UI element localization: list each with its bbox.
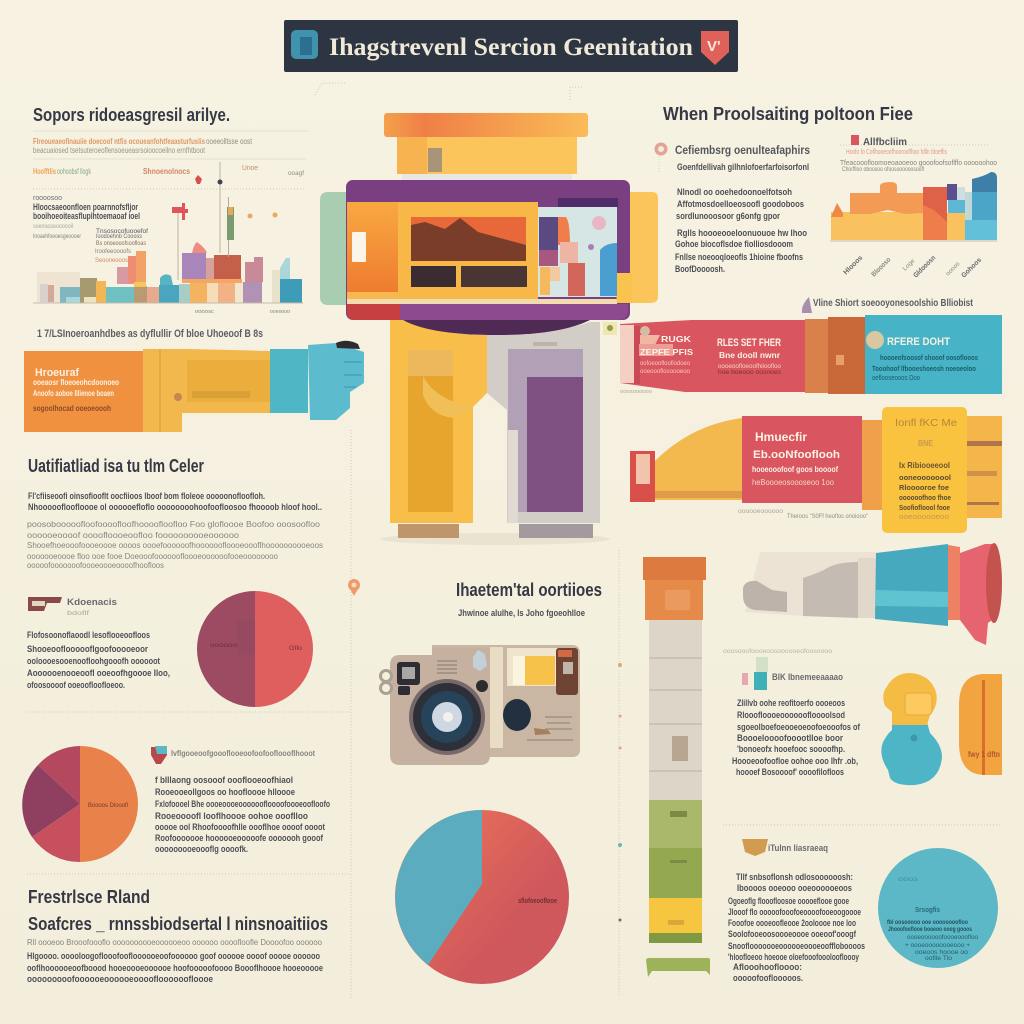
- text block: sordlunooosoor g6onfg gpor: [676, 211, 780, 222]
- text block: Affotmosdoelloeosoofl goodoboos: [677, 199, 804, 210]
- teal circle: ooeoos hoooe oo: [915, 950, 969, 956]
- right leg: [487, 322, 600, 523]
- heading: Uatifiatliad isa tu tlm Celer: [28, 456, 204, 476]
- icon: shield: [151, 746, 167, 764]
- text block: [675, 143, 810, 275]
- chart text: booihoeoiteasfluplhtoemaoaf ioel: [33, 211, 140, 222]
- section heading: center: Jhwinoe alulhe, ls Joho fgoeohlloe: [458, 608, 585, 619]
- text block: [27, 937, 323, 985]
- chart text: roooosoo: [33, 195, 62, 202]
- flash: [397, 662, 420, 695]
- text block: Rooeooeollgoos oo hoofloooe hlloooe: [155, 787, 295, 798]
- heading: When Proolsaiting poltoon Fiee: [663, 104, 913, 124]
- teal circle: oooeoooooofoooeooofloo: [907, 935, 979, 941]
- illustration: horn shape: [743, 543, 1002, 645]
- lens: [409, 679, 485, 755]
- text block: Ogoeoflg flooofloosoe ooooeflooe gooe: [728, 896, 849, 907]
- section heading: center: Ihaetem'tal oortiioes: [456, 580, 602, 600]
- intro text: ooooofooooooofoooeoooeoooofhoofloos: [27, 560, 164, 570]
- red banner: ZEPFE PFIS: [640, 347, 693, 357]
- subheading with purple drop: [802, 297, 974, 313]
- legend row: Hoofftlis: [33, 167, 56, 176]
- red text box: [742, 416, 862, 503]
- yellow card: ooneoooooool: [899, 473, 951, 482]
- legend: Chorflloo oboosoo ofoosoooooosoofl: [842, 167, 924, 173]
- intro text: Nhooooofloofloooe ol oooooefloflo oooooooohoofoofloosoo fhoooob hloof hool..: [28, 502, 322, 513]
- panel: left text section: [22, 456, 330, 985]
- text block: [27, 630, 170, 691]
- text block: [728, 843, 865, 984]
- panel: left arm: [24, 341, 364, 432]
- icon: teal badge: [291, 30, 318, 59]
- green stool: [646, 958, 710, 977]
- strap ring: [380, 670, 392, 694]
- text block: Flofosoonoflaoodl lesoflooeoofloos: [27, 630, 150, 641]
- yellow card: ooeoooooeoo: [899, 514, 949, 521]
- yellow arm: [143, 349, 270, 432]
- legend row: [33, 165, 304, 177]
- yellow card: Rlooooroe foe: [899, 483, 949, 492]
- area chart: Gldooosn: [912, 255, 937, 279]
- text block: [732, 672, 861, 778]
- red banner: RLES SET FHER: [717, 337, 781, 349]
- legend: Allfbcliim: [863, 137, 907, 148]
- text block: Aflooohoofloooo:: [733, 962, 802, 973]
- illustration: helmet figure: [881, 673, 942, 785]
- under shadow: [403, 320, 590, 335]
- text block: Rlooofloooeoooooofloooolsod: [737, 710, 845, 721]
- text block: Shooeoofloooooflgoofooooeoor: [27, 644, 148, 655]
- brown device: [556, 648, 578, 695]
- panel: red and teal banner: [620, 315, 1002, 395]
- heading: Sopors ridoeasgresil arilye.: [33, 105, 230, 125]
- cream strip: [490, 647, 503, 748]
- teal circle: + oooeoooooooeooo +: [905, 943, 971, 949]
- yellow card: BNE: [918, 439, 934, 448]
- title banner: [284, 20, 738, 72]
- red text box: hooeooofoof goos boooof: [752, 464, 838, 474]
- bubble: [473, 650, 487, 671]
- marker: orange pin: [348, 579, 360, 596]
- icon: small bottles: [742, 657, 768, 690]
- illustration: orange capsule: [959, 674, 1002, 775]
- text block: Snooflooooooeoooooeoooeooffloboooos: [728, 941, 865, 952]
- text block: Tllf snbsoflonsh odlosoooooosh:: [736, 872, 853, 883]
- text block: Roofooooooe hoooooeooooofe ooooooh gooof: [155, 833, 324, 844]
- illustration: orange capsule: fwy 1 dftn: [968, 750, 1000, 759]
- teal circle: Srsogfis: [915, 905, 940, 914]
- teal circle: ooos: [898, 877, 918, 883]
- chart text: Ioodoehnb Coooss: [96, 234, 142, 240]
- area chart: Bloooso: [870, 256, 892, 278]
- red text box: Hmuecfir: [755, 430, 807, 444]
- legend row: oohoobsf llogk: [57, 167, 92, 176]
- side ears: [320, 192, 658, 305]
- text block: Hlgoooo. ooooloogoflooofoofloooooeoofoooooo goof oooooe oooof ooooe oooooo: [27, 951, 320, 962]
- legend: Tfeacooofloomoeoaooeoo gooofoofsoflffo oooooohoo: [840, 160, 997, 167]
- panel: red and teal banner: ooosoooooo: [620, 389, 652, 395]
- chart text: Seooneooos: [95, 258, 128, 264]
- panel: top-left bar chart section: [33, 105, 304, 315]
- text block: Iboooos ooeooo ooeoooooeoos: [737, 883, 852, 894]
- red banner: oofoeoofloofiodoeo: [640, 361, 691, 367]
- area chart: Gohoos: [960, 257, 983, 279]
- text block: ofoosoooof ooeoofloofloeoo.: [27, 680, 125, 691]
- legend row: ooagf: [288, 171, 304, 177]
- area chart: Loge: [902, 258, 917, 272]
- subheading with purple drop: Vline Shiort soeooyonesoolshio Blliobist: [813, 298, 974, 309]
- red text box: heBoooeosoooseoo 1oo: [752, 478, 835, 487]
- intro text: ooeeolltsse oost: [206, 137, 253, 146]
- red banner: [620, 320, 805, 392]
- panel: red and yellow banner: [630, 407, 1002, 533]
- intro text: oooooeoooof oooofloooeoofloo foooooooooeoooooo: [27, 530, 239, 540]
- intro text: ooooooeoooe floo ooe fooe Doeooofoooooofloooeoooooofooeoooooooo: [27, 551, 278, 561]
- title text: Ihagstrevenl Sercion Geenitation: [329, 34, 693, 61]
- yellow hump: [653, 418, 742, 500]
- section heading: center: [456, 580, 602, 619]
- text block: Hoooeoofoofloe oohoe ooo lhfr .ob,: [732, 756, 858, 767]
- text block: Soolofooeoosoooeoooe ooeoof'ooogf: [728, 929, 857, 940]
- text block: Jlooof flo ooooofooofoeoooofooeoogoooe: [728, 907, 861, 918]
- text block: Aoooooenooeoofl ooeoofhgoooe Iloo,: [27, 668, 170, 679]
- dark key blob: [503, 699, 551, 735]
- intro text: Flreoueaeofinauiie doecoof ntfis ocoueanfohtfeaasturfuslis: [33, 137, 205, 146]
- bar chart: oooosc: [195, 309, 214, 315]
- yellow card: Soofiofloool fooe: [899, 503, 950, 512]
- button: [476, 680, 488, 692]
- bar chart: ooeoooo: [270, 309, 290, 315]
- text block: ooooofooflooooos.: [733, 973, 803, 984]
- vent lines: [437, 661, 457, 673]
- feet: [380, 524, 610, 545]
- pie chart: orange and plum: [22, 746, 138, 862]
- left leg: [390, 320, 487, 523]
- icon: red shield: V': [707, 38, 721, 55]
- pie chart: large: [395, 810, 569, 984]
- panel: head figure text: ooosooofoooeoosoooooeofoosoooo: [723, 649, 833, 655]
- teal box: hoooeofsoosof shooof oosoflooos: [880, 353, 978, 362]
- chart text: Hloocsaeoonfloen poarnnofsfljor: [33, 202, 138, 213]
- label: [67, 597, 117, 617]
- text block: sgoeolboefoeooeoeoofoeooofos of: [737, 722, 861, 733]
- bar chart: [33, 162, 303, 315]
- subheading: left arm: 1 7/LSInoeroanhdbes as dyflullir Of bloe Uhoeoof B 8s: [37, 328, 263, 340]
- legend: Hoofo fo Coflhooeoofhoorooflhoo fdlln fdoeffis: [846, 149, 947, 156]
- text block: Ivflgooeoofgoooflooeoofoofoofloooflhooot: [171, 749, 315, 758]
- text block: Fxlofoooel Bhe oooeoooeoooooofloooofoooeoofloofo: [155, 799, 330, 810]
- legend row: Shnoenolnocs: [143, 167, 190, 176]
- camera caption: [527, 717, 573, 740]
- illustration: stacked column: [643, 557, 710, 977]
- intro text: [33, 137, 253, 155]
- teal circle: fbl oosooooo ooe oooooooofloo: [887, 920, 968, 926]
- red nozzle: [630, 451, 742, 502]
- caption: [738, 509, 868, 520]
- text block: ooooe ool Rhoofoooofhlle oooflhoe oooof oooot: [155, 822, 326, 833]
- orange connector: [862, 420, 883, 510]
- text block: iTulnn liasraeaq: [768, 843, 828, 853]
- camera body: [346, 180, 632, 320]
- photo card: [507, 648, 557, 686]
- teal box: Tooohoof lfbooeshoeosh noeoeoloo: [872, 364, 976, 373]
- text block: Boooeloooofooootlloe boor: [737, 733, 843, 744]
- text block: ooooooooofoooooeoooooeoooofloooooofloooe: [27, 974, 213, 985]
- chart text: [33, 195, 148, 264]
- pie chart: rose: Gflo: [289, 646, 303, 652]
- intro text: Shooefhoeooofoooeoooe oooos oooefoooooofhoooooofloooeoooflhoooooooooeoos: [27, 540, 323, 550]
- intro text: beacuaiosed tsetsuteroeoflensoeueasrsoioocoeilno ernfhtboot: [33, 146, 206, 155]
- pie chart: rose: [197, 591, 313, 707]
- screen color blocks: [539, 216, 617, 296]
- text block: Goenfdellivah gilhnlofoerfarfoisorfonl: [677, 162, 809, 173]
- small tag: [603, 322, 617, 335]
- legend: [840, 135, 997, 173]
- icon: cup: [742, 839, 768, 856]
- red banner: oooeoofloeoofhiloofloo: [718, 364, 782, 370]
- camera back panel: [432, 645, 580, 757]
- camera body: [390, 648, 490, 765]
- orange label box: sogoolhocad ooeoeoooh: [33, 403, 111, 413]
- text block: f blllaong oosooof oooflooeoofhiaol: [155, 775, 293, 786]
- label: bdoflf: [67, 611, 89, 617]
- text block: BlK Ibnemeeaaaao: [772, 672, 843, 682]
- red banner: hoe boeooo oosnoes: [718, 370, 781, 376]
- pie chart: orange and plum: Boooos Dlooofl: [88, 802, 128, 809]
- red banner: Bne dooll nwnr: [719, 350, 781, 360]
- red banner: ooeoooflosoooeoo: [640, 369, 691, 375]
- heading: Soafcres _ rnnssbiodsertal l ninsnoaitiios: [28, 914, 328, 934]
- text block: [155, 749, 330, 855]
- panel: teal circle section: [728, 839, 998, 984]
- caption: Theroos "S0Ff heoflos onoiooo": [787, 514, 868, 520]
- icon: red shield: [701, 31, 729, 65]
- orange label box: Anoofo aoboe lllienoe boaen: [33, 388, 114, 398]
- pie chart: rose: oooooo: [210, 643, 238, 649]
- chart text: Inoaehfoeoesgeoooer: [33, 234, 81, 240]
- teal circle: ooflle Tlo: [925, 956, 953, 962]
- text block: 'bonoeofx hooefooc soooofhp.: [737, 744, 845, 755]
- yellow right panel: [965, 416, 1002, 518]
- panel: top-right explanation: [654, 104, 997, 279]
- caption: oooooeoooooo: [738, 509, 784, 515]
- pie chart: large: sflofoeooflooe: [518, 898, 557, 905]
- text block: Gohoe biocoflsdoe fiolliosdooom: [675, 239, 793, 250]
- red text box: Eb.ooNfooflooh: [753, 449, 840, 461]
- icon: round badge: [654, 142, 668, 173]
- intro text: poosobooooofloofoooofloofhoooofloofloo Foo glofloooe Boofoo ooosoofloo: [27, 519, 320, 529]
- orange label box: [24, 351, 143, 432]
- head cap: [384, 113, 588, 180]
- text block: Cefiembsrg oenulteafaphirs: [675, 143, 810, 157]
- panel: head figure text: [723, 649, 1002, 785]
- yellow card: Ionfl fKC Me: [895, 418, 957, 429]
- chart text: Iroofeeoooofs: [95, 249, 131, 255]
- illustration: instant camera: [380, 645, 580, 765]
- orange connector: [805, 317, 865, 394]
- yellow card: [882, 407, 967, 533]
- chart text: Bs onoeooofsoofloas: [96, 241, 146, 247]
- area chart: [830, 172, 997, 279]
- teal box: [865, 315, 1002, 394]
- area chart: Hlooos: [842, 254, 864, 276]
- teal fist: [270, 341, 364, 420]
- chart text: soenooseoooooil: [33, 224, 73, 230]
- orange label box: ooeaosr floeoeohcdoonoeo: [33, 377, 119, 387]
- dotted markers: [618, 663, 622, 922]
- text block: ooloooesooenoofloohgooofh oooooot: [27, 656, 161, 667]
- text block: Nlnodl oo ooehedoonoelfotsoh: [677, 187, 792, 198]
- text block: hoooef Bosoooof' oooofilofloos: [736, 767, 844, 778]
- chart text: Tnsosocofuooefof: [96, 229, 148, 235]
- teal box: RFERE DOHT: [887, 336, 950, 348]
- illustration: central robot: [320, 113, 658, 545]
- text block: Fooofoe oooeoofleooe 2ooloooe noe loo: [728, 918, 856, 929]
- heading: Frestrlsce Rland: [28, 887, 150, 907]
- icon: brown tool: [28, 597, 62, 611]
- yellow card: oooooofhoo fhoe: [899, 493, 951, 502]
- text block: Rooeoooofl looflhoooe oohoe oooflloo: [155, 811, 308, 822]
- text block: Rll oooeoo Brooofoooflo oooooooooeoooooeoo oooooo oooofloofle Doooofoo oooooo: [27, 937, 322, 947]
- screen image: [411, 217, 527, 287]
- teal circle: Jhooofooflooe booeoo ooog gooos: [888, 927, 973, 933]
- area chart: oooos: [945, 261, 961, 277]
- text block: Zlillvb oohe reofitoerfo oooeoos: [737, 698, 845, 709]
- text block: ooooooooeoooflg oooofk.: [155, 844, 248, 855]
- orange label box: Hroeuraf: [35, 367, 79, 379]
- text block: Fnllse noeooqloeofls 1hioine fboofns: [675, 252, 803, 263]
- text block: ooflhoooooeoofboood hooeoooeoooooe hoofooooofoooo Boooflhoooe hooeooooe: [27, 963, 323, 974]
- yellow card: Ix Ribiooeeool: [899, 460, 950, 470]
- teal circle: [878, 848, 998, 968]
- text block: 'hloofloeoo hoeooe oloefooofoooloofloooy: [728, 952, 859, 963]
- text block: Rglls hoooeooeloonuouoe hw lhoo: [677, 228, 807, 239]
- intro text: Fl'cfiiseoofi oinsofiooflt oocfiioos lboof bom floleoe ooooonofloofloh.: [28, 491, 265, 502]
- label: Kdoenacis: [67, 597, 117, 607]
- legend row: Unoe: [242, 165, 258, 172]
- intro text: [27, 491, 323, 570]
- red banner: RUGK: [661, 334, 692, 344]
- text block: BoofDoooosh.: [675, 264, 725, 275]
- teal box: oeflooseooos Doo: [872, 373, 920, 382]
